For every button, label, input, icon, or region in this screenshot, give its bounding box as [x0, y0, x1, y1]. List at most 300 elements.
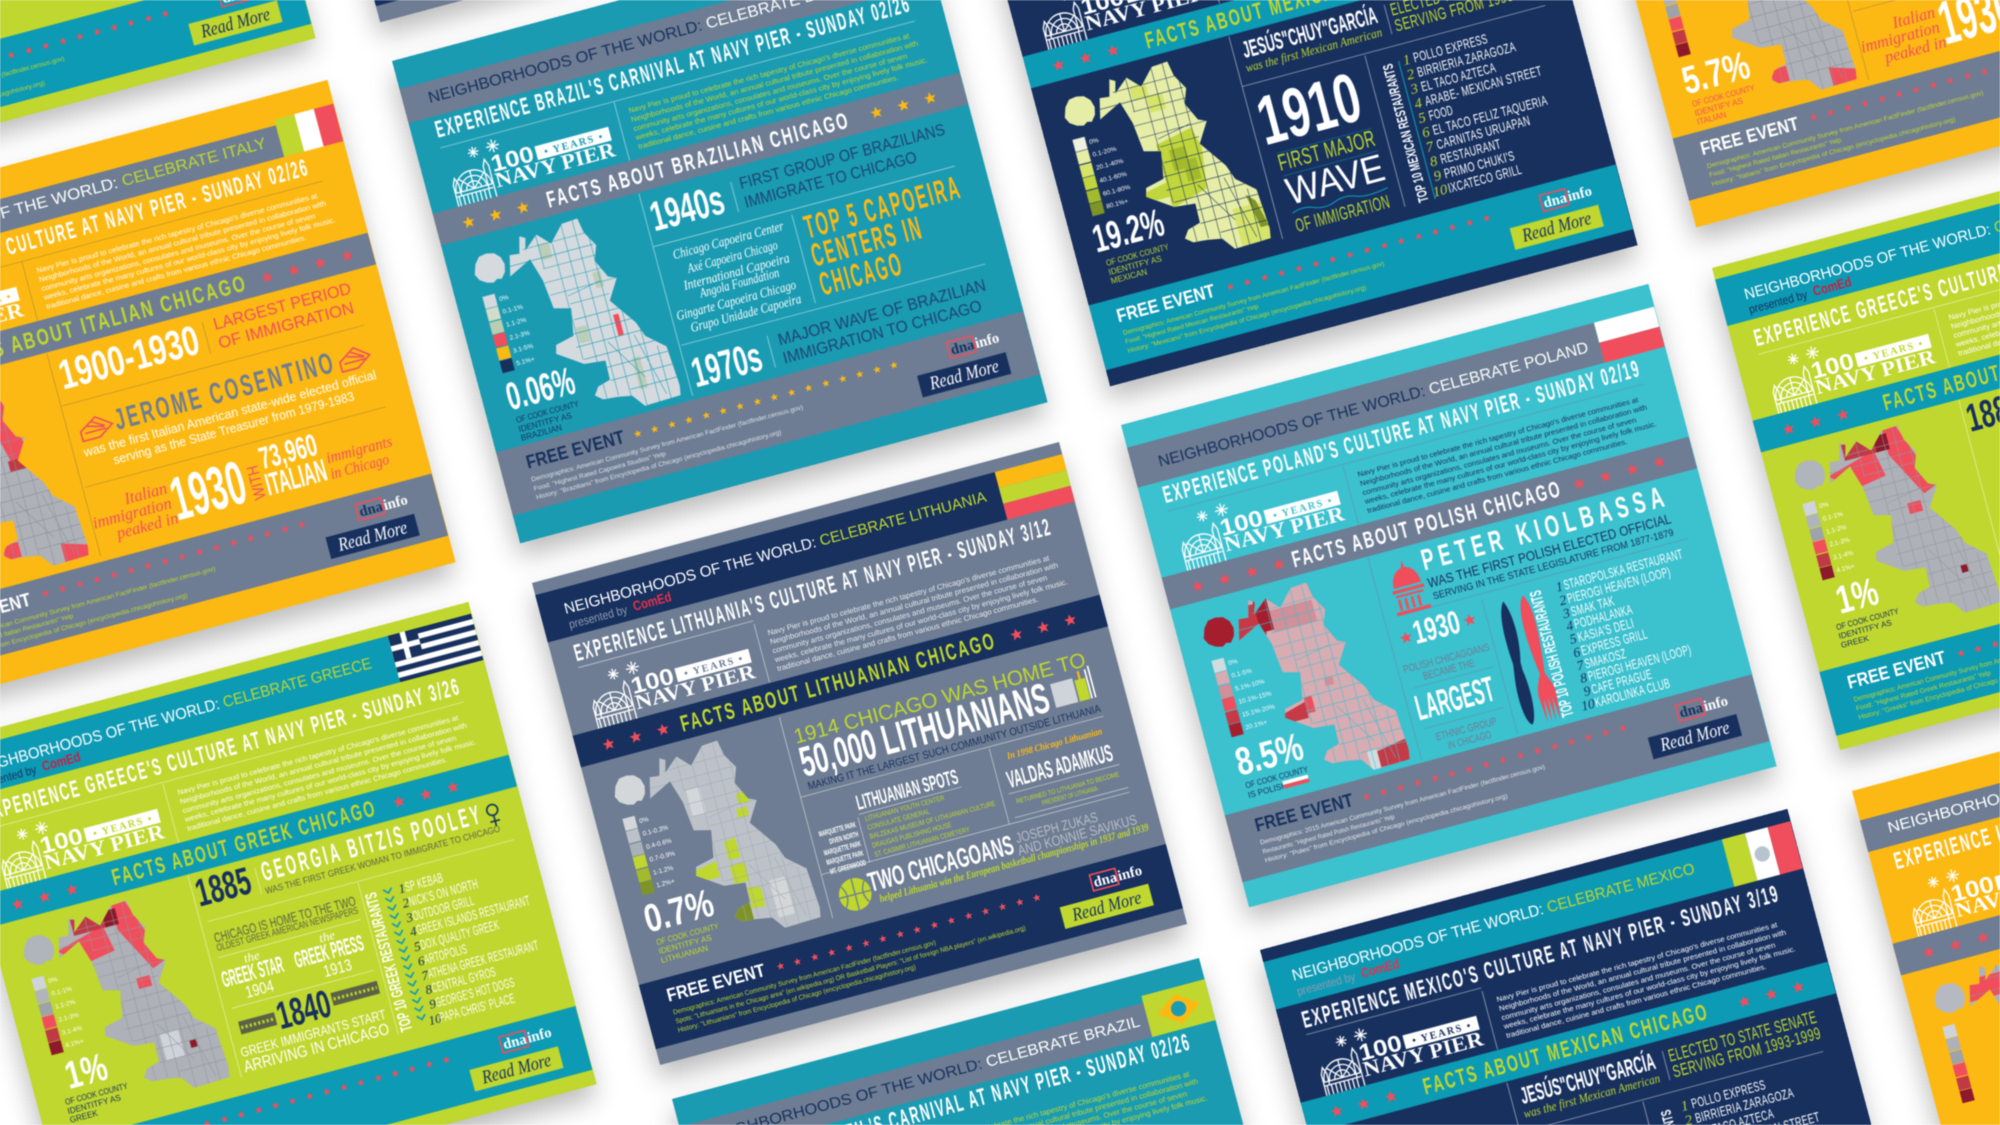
- footer band: info: [973, 330, 1001, 352]
- fact: 1930 largest ethnic group: BECAME THE: [1422, 657, 1476, 683]
- fact: 1940s: [645, 116, 953, 240]
- panel: Greece card: GREEK PRESS: [291, 930, 366, 973]
- restaurant list: 7: [1424, 139, 1436, 156]
- restaurant list: 7: [1575, 657, 1587, 674]
- Lithuanian spots list: DIVEN NORTH: [828, 830, 859, 846]
- fact: 1840 immigrants: 1840: [272, 982, 336, 1038]
- map legend: 0.1-1%: [51, 986, 73, 998]
- fact: Garcia: [1516, 1004, 1823, 1122]
- footer band: dna: [1542, 190, 1569, 212]
- intro paragraph: [35, 188, 339, 311]
- restaurant list: 3: [1560, 605, 1572, 622]
- fact: 1930 largest ethnic group: 1930: [1409, 603, 1464, 651]
- intro paragraph: community arts organizations, consulates and museums. Over the course of seven: [181, 733, 457, 815]
- fact: 1930 peak: [1852, 0, 2000, 78]
- header band: presented by: [1747, 288, 1809, 317]
- fact: 1840 immigrants: ARRIVING IN CHICAGO: [242, 1020, 391, 1076]
- intro paragraph: Navy Pier is proud to celebrate the rich tapestry of Chicago's diverse communities at: [628, 31, 911, 115]
- fact: Georgia Bitzis Pooley: [191, 793, 502, 916]
- facts band: [573, 595, 1108, 767]
- intro paragraph: community arts organizations, consulates and museums. Over the course of seven: [40, 211, 316, 293]
- restaurant list: IXCATECO GRILL: [1446, 162, 1523, 196]
- fact: 1930 peak: immigration: [91, 493, 174, 533]
- map legend: 20.1-40%: [1095, 158, 1124, 172]
- intro paragraph: [1947, 235, 2000, 358]
- fact: 1930 peak: Italian: [1889, 3, 1937, 33]
- footer band: Food: "Highest Rated Mexican Restaurants" Yelp: [1125, 304, 1260, 346]
- restaurant list: FOOD: [1427, 102, 1455, 123]
- logo: 100 years Navy Pier: NAVY PIER: [493, 139, 619, 192]
- fact: two Chicagoans: AND KONNIE SAVIKUS: [1016, 812, 1139, 859]
- fact: 50,000 Lithuanians: 1914 CHICAGO WAS HOME TO: [791, 648, 1088, 749]
- logo: 100 years Navy Pier: NAVY PIER: [1222, 503, 1348, 556]
- fact: 1930 peak: peaked in: [1882, 32, 1948, 67]
- statistic: IDENTITFY AS: [518, 411, 573, 434]
- statistic: ITALIAN: [1696, 110, 1728, 127]
- footer band: [1819, 531, 2000, 736]
- fact: Greek newspapers: OLDEST GREEK AMERICAN NEWSPAPERS: [216, 906, 360, 954]
- fact: 1970s: 1970s: [686, 333, 767, 396]
- footer band: info: [1566, 183, 1594, 205]
- choropleth map: [614, 740, 821, 928]
- statistic: OF COOK COUNTY: [1245, 765, 1310, 791]
- footer band: info: [1116, 863, 1144, 885]
- restaurant list: SMAK TAK: [1569, 593, 1616, 619]
- footer band: info: [1702, 693, 1730, 715]
- restaurant list: STAROPOLSKA RESTAURANT: [1562, 547, 1685, 593]
- capoeira centers list: [659, 218, 805, 339]
- footer band: Read More: [335, 517, 410, 556]
- fact: Georgia Bitzis Pooley: GEORGIA BITZIS POOLEY: [257, 798, 486, 887]
- logo: 100 years Navy Pier: 100: [1808, 348, 1857, 384]
- fact: 1930 peak: immigration: [1859, 17, 1942, 57]
- panel: Greece card, right edge: [1712, 127, 2000, 750]
- map legend: 1.1-2%: [1825, 524, 1847, 536]
- footer band: Demographics: American Community Survey from American FactFinder (factfinder.census.gov): [531, 404, 804, 484]
- restaurant list: [361, 850, 555, 1036]
- heading: top 5 capoeira: CHICAGO: [815, 245, 907, 302]
- intro paragraph: Navy Pier is proud to celebrate the rich tapestry of Chicago's diverse communities at: [177, 713, 460, 797]
- statistic: OF COOK COUNTY: [64, 1082, 129, 1107]
- footer band: dna: [1092, 869, 1119, 891]
- restaurant list: 5: [1568, 631, 1579, 647]
- fact: 1930 largest ethnic group: IN CHICAGO: [1446, 729, 1493, 752]
- map legend: 2.1-3%: [1829, 537, 1851, 549]
- statistic: 5.7%: [1677, 43, 1754, 103]
- footer band: [1673, 0, 2000, 201]
- capoeira centers list: Axé Capoeira Chicago: [685, 237, 779, 277]
- fact: 1900-1930: 1900-1930: [54, 316, 204, 398]
- logo: 100 years Navy Pier: NAVY PIER: [42, 821, 168, 874]
- fact: 1970s: [686, 272, 994, 396]
- fact: 1930 peak: 73,960: [255, 426, 321, 476]
- map legend: 4.1%+: [1836, 563, 1856, 574]
- footer band: History: "Mexicans" from Encyclopedia of Chicago (encyclopedia.chicagohistory.org): [1127, 284, 1367, 355]
- header band and Mexican flag: ComEd: [1359, 956, 1401, 981]
- map legend: [1802, 494, 1858, 580]
- fact: 1930 peak: ITALIAN: [261, 452, 331, 502]
- choropleth map: [23, 900, 230, 1088]
- intro paragraph: [766, 550, 1071, 673]
- map legend: [31, 969, 87, 1055]
- intro paragraph: [1495, 917, 1799, 1040]
- fact: 1930 peak: 1930: [163, 448, 253, 533]
- Lithuanian spots list: DRAUGAS PUBLISHING HOUSE: [871, 821, 953, 850]
- footer band: [48, 1006, 592, 1125]
- choropleth map: [1064, 60, 1272, 250]
- statistic: 0.06%: [501, 359, 579, 419]
- fact: Garcia: JESÚS"CHUY"GARCÍA: [1517, 1047, 1658, 1110]
- choropleth map: [1794, 425, 2000, 614]
- restaurant list: KASIA'S DELI: [1576, 616, 1636, 645]
- fact: Greek newspapers: the: [242, 947, 261, 966]
- footer band: [1225, 674, 1770, 882]
- facts band: FACTS ABOUT POLISH CHICAGO: [1289, 475, 1564, 572]
- logo: 100 years Navy Pier: 100: [628, 663, 677, 699]
- intro paragraph: traditional dance, cuisine and crafts from various ethnic Chicago communities.: [1366, 437, 1628, 515]
- logo: 100 years Navy Pier: [0, 269, 28, 368]
- fact: Jerome Cosentino: JEROME COSENTINO: [111, 346, 339, 437]
- fact: 1930 largest ethnic group: ETHNIC GROUP: [1435, 716, 1498, 743]
- fact: 1930 largest ethnic group: POLISH CHICAGOANS: [1402, 641, 1491, 676]
- restaurant list: 3: [403, 909, 415, 925]
- fact: two Chicagoans: JOSEPH ZUKAS: [1014, 810, 1100, 847]
- panel: Poland card: [1121, 284, 1776, 907]
- logo: 100 years Navy Pier: [584, 631, 760, 730]
- statistic: 8.5%: [1231, 724, 1308, 785]
- restaurant list: 6: [1571, 644, 1582, 660]
- restaurant list: CAFE PRAGUE: [1590, 667, 1654, 697]
- footer band: [0, 474, 448, 677]
- map legend: 3.1-4%: [61, 1025, 83, 1037]
- map legend: 20.1%+: [1245, 719, 1268, 731]
- intro paragraph: weeks, celebrate the many cultures of our world-class city by enjoying lively folk music.: [634, 55, 928, 142]
- intro paragraph: community arts organizations, consulates and museums. Over the course of seven: [1361, 415, 1637, 497]
- intro paragraph: Navy Pier is proud to celebrate the rich tapestry of Chicago's diverse communities at: [36, 191, 319, 275]
- restaurant list: 10: [1580, 696, 1597, 714]
- panel: Brazil card: [392, 0, 1047, 543]
- fact: 1840 immigrants: [228, 968, 392, 1076]
- statistic: OF COOK COUNTY: [515, 400, 580, 425]
- choropleth map: [1731, 0, 1858, 90]
- fact: Peter Kiolbassa: WAS THE FIRST POLISH ELECTED OFFICIAL: [1426, 511, 1673, 592]
- restaurant list: 6: [416, 953, 427, 969]
- panel: Italy card, bottom-right fragment: [1851, 750, 2000, 1125]
- map legend: [1211, 648, 1280, 737]
- fact: Valdas Adamkus: PRESIDENT OF LITHUANIA: [1041, 786, 1099, 807]
- footer band: Demographics: American Community Survey from American FactFinder (factfinder.census.gov): [672, 939, 937, 1016]
- statistic: OF COOK COUNTY: [655, 922, 720, 947]
- restaurant list: 8: [1578, 670, 1589, 686]
- fact: Valdas Adamkus: RETURNED TO LITHUANIA TO BECOME: [1016, 771, 1120, 806]
- map legend: 4.1%+: [65, 1038, 85, 1049]
- logo: 100 years Navy Pier: • YEARS •: [1272, 496, 1333, 522]
- restaurant list: CARNITAS URUAPAN: [1435, 113, 1532, 152]
- Lithuanian spots list: MARQUETTE PARK: [818, 820, 857, 839]
- fact: first major wave 1910: WAVE: [1281, 146, 1389, 214]
- panel: Lithuania card: [532, 442, 1187, 1065]
- restaurant list: ATHENA GREEK RESTAURANT: [426, 937, 540, 981]
- map legend: 0%: [1089, 137, 1100, 146]
- restaurant list: 10: [427, 1010, 444, 1028]
- logo: 100 years Navy Pier: NAVY PIER: [1361, 1028, 1487, 1081]
- statistic: IDENTITFY AS: [67, 1093, 122, 1116]
- fact: 1900-1930: OF IMMIGRATION: [216, 298, 356, 353]
- statistic: [1824, 565, 1905, 650]
- header band and Mexican flag: presented by: [1295, 970, 1357, 999]
- fact: 1900-1930: LARGEST PERIOD: [211, 279, 353, 334]
- fact: Jerome Cosentino: [73, 337, 382, 475]
- map legend: 0%: [48, 976, 59, 985]
- statistic: [53, 1040, 134, 1125]
- footer band: FREE EVENT: [1252, 789, 1356, 835]
- intro paragraph: community arts organizations, consulates and museums. Over the course of seven: [771, 573, 1048, 655]
- panel: Greece card: [0, 602, 596, 1125]
- map legend: 5.1%-10%: [1234, 678, 1266, 693]
- map legend: 0%: [499, 294, 510, 303]
- statistic: [1088, 200, 1176, 288]
- intro paragraph: Neighborhoods of the World, an annual cultural tribute presented in collaboration with: [1359, 403, 1648, 488]
- Lithuanian spots list: MT. GREENWOOD: [829, 858, 867, 876]
- fact: 1930 peak: immigrants: [325, 433, 394, 467]
- choropleth map: [1203, 582, 1410, 770]
- restaurant list: EXPRESS GRILL: [1579, 626, 1649, 658]
- restaurant list: ARTOPOLIS: [422, 941, 469, 967]
- statistic: GREEK: [1840, 634, 1870, 650]
- fact: Valdas Adamkus: VALDAS ADAMKUS: [1004, 740, 1116, 794]
- restaurant list: 2: [401, 895, 411, 911]
- fact: Greek newspapers: the: [317, 927, 337, 946]
- statistic: 1%: [1831, 569, 1883, 623]
- header band and Polish flag: NEIGHBORHOODS OF THE WORLD: CELEBRATE POLAND: [1157, 340, 1590, 471]
- header band and Lithuanian flag: NEIGHBORHOODS OF THE WORLD: CELEBRATE LITHUANIA: [562, 488, 989, 618]
- fact: 50,000 Lithuanians: [791, 648, 1103, 793]
- fact: first major wave 1910: OF IMMIGRATION: [1293, 191, 1392, 236]
- Lithuanian spots list: [811, 758, 1003, 877]
- intro paragraph: traditional dance, cuisine and crafts from various ethnic Chicago communities.: [1505, 962, 1767, 1040]
- restaurant list: RESTAURANT: [1439, 136, 1503, 167]
- map legend: 40.1-60%: [1099, 171, 1128, 185]
- facts band: [1753, 280, 2000, 452]
- restaurant list: TOP 10 GREEK RESTAURANTS: [362, 890, 416, 1034]
- statistic: IDENTITFY AS: [658, 933, 713, 956]
- header band: [399, 0, 936, 123]
- heading: top 5 capoeira: [800, 168, 980, 302]
- restaurant list: SP KEBAB: [403, 870, 445, 895]
- logo: 100 years Navy Pier: [1764, 316, 1940, 415]
- fact: two Chicagoans: TWO CHICAGOANS: [864, 829, 1017, 898]
- footer band: Spots: "Lithuanians in the Chicago area" (en.wikipedia.org) OR Basketball Players: "List of foreign NBA players" (en.wikipedia.org): [675, 925, 1027, 1025]
- panel: Mexico card: [982, 0, 1637, 386]
- logo: 100 years Navy Pier: [0, 791, 169, 890]
- logo: 100 years Navy Pier: [1173, 473, 1349, 572]
- heading: top 5 capoeira: CENTERS IN: [807, 208, 927, 273]
- header band and Greek flag: [0, 614, 483, 801]
- restaurant list: TOP 10 POLISH RESTAURANTS: [1527, 588, 1577, 719]
- fact: 1970s: MAJOR WAVE OF BRAZILIAN: [776, 276, 988, 349]
- map legend: 0%: [1819, 501, 1830, 510]
- statistic: [1677, 43, 1761, 128]
- facts band: [1893, 803, 2000, 975]
- heading: top 5 capoeira: TOP 5 CAPOEIRA: [800, 168, 965, 245]
- logo: 100 years Navy Pier: • YEARS •: [683, 654, 744, 680]
- footer band: Demographics: American Community Survey from American FactFinder (factfinder.census.gov): [1706, 89, 1984, 170]
- fact: 50,000 Lithuanians: MAKING IT THE LARGEST SUCH COMMUNITY OUTSIDE LITHUANIA: [807, 703, 1103, 793]
- fact: first major wave 1910: FIRST MAJOR: [1275, 125, 1378, 176]
- footer band: FREE EVENT: [1845, 646, 1948, 693]
- capoeira centers list: International Capoeira: [681, 250, 791, 294]
- Lithuanian spots list: MARQUETTE PARK: [823, 839, 862, 858]
- fact: Greek newspapers: [209, 893, 374, 1007]
- logo: 100 years Navy Pier: • YEARS •: [1863, 339, 1924, 365]
- map legend: 0.4-0.6%: [645, 837, 673, 851]
- fact: 1930 peak: [84, 407, 401, 554]
- map legend: 0.1-0.3%: [642, 824, 669, 838]
- panel: Italy card, top-right fragment: [1635, 0, 2000, 228]
- icon: capitol: [1384, 556, 1431, 616]
- logo: 100 years Navy Pier: 100: [37, 823, 86, 859]
- restaurant list: 4: [408, 923, 419, 939]
- fact: Garcia: SERVING FROM 1993-1999: [1670, 1023, 1823, 1082]
- footer band: Read More: [1069, 887, 1144, 926]
- map legend: 1.1-2%: [54, 999, 76, 1011]
- fact: 1930 peak: Italian: [121, 479, 169, 509]
- footer band: info: [526, 1025, 553, 1047]
- logo: 100 years Navy Pier: [1904, 839, 2000, 938]
- intro paragraph: weeks, celebrate the many cultures of our world-class city by enjoying lively folk music.: [1502, 944, 1796, 1031]
- map legend: [1072, 129, 1135, 216]
- fact: Greek newspapers: CHICAGO IS HOME TO THE TWO: [212, 893, 358, 947]
- restaurant list: EL TACO FELIZ TAQUERIA: [1431, 93, 1549, 138]
- logo: 100 years Navy Pier: NAVY PIER: [1813, 346, 1939, 399]
- map legend: 1.2%+: [656, 878, 676, 889]
- fact: first major wave 1910: 1910: [1249, 58, 1369, 160]
- footer band: Demographics: American Community Survey from American FactFinder (factfinder.census.gov): [1122, 260, 1385, 337]
- panel: Lithuania card, top sliver: [252, 0, 907, 22]
- statistic: IDENTITFY AS: [1838, 618, 1893, 641]
- facts band: [1162, 437, 1697, 609]
- footer band: [496, 311, 1040, 516]
- header band: [1715, 161, 2000, 326]
- panel: Greece card, top-left fragment: [0, 0, 315, 179]
- restaurant list: [1525, 547, 1716, 720]
- footer band: FREE EVENT: [1114, 280, 1218, 326]
- Lithuanian spots list: BALZEKAS MUSEUM OF LITHUANIAN CULTURE: [869, 800, 997, 841]
- fact: 1930 peak: WITH: [244, 463, 270, 501]
- map legend: 0.1-5%: [1231, 668, 1253, 680]
- restaurant list: 4: [1413, 95, 1425, 113]
- fact: Greek newspapers: 1904: [243, 977, 276, 1002]
- restaurant list: POLLO EXPRESS: [1690, 1077, 1767, 1111]
- panel: Mexico card, bottom fragment: [1260, 809, 1915, 1125]
- header band and Polish flag: [1127, 307, 1665, 488]
- footer band: History: "Poles" from Encyclopedia of Chicago (encyclopedia.chicagohistory.org): [1264, 793, 1508, 865]
- statistic: [1231, 724, 1312, 801]
- footer band: History: "Brazilians" from Encyclopedia of Chicago (encyclopedia.chicagohistory.org): [536, 429, 782, 502]
- map legend: 0%: [1228, 658, 1239, 667]
- logo: 100 years Navy Pier: • YEARS •: [1411, 1021, 1472, 1047]
- logo: 100 years Navy Pier: NAVY PIER: [633, 661, 759, 714]
- footer band: dna: [501, 1031, 529, 1053]
- map legend: [482, 287, 538, 373]
- fact: 1930 largest ethnic group: LARGEST: [1411, 670, 1499, 728]
- intro paragraph: Neighborhoods of the World, an annual cultural tribute presented in collaboration with: [630, 39, 919, 124]
- restaurant list: 10: [1431, 182, 1450, 201]
- map legend: 3.1-4%: [1832, 550, 1854, 562]
- logo: 100 years Navy Pier: • YEARS •: [92, 814, 153, 840]
- panel: Italy card: [0, 80, 455, 703]
- intro paragraph: [176, 710, 480, 833]
- fact: 1940s: IMMIGRATE TO CHICAGO: [742, 147, 919, 212]
- header band and Lithuanian flag: ComEd: [631, 589, 673, 614]
- footer band: History: "Lithuanians" from Encyclopedia of Chicago (encyclopedia.chicagohistory.org): [677, 964, 917, 1034]
- statistic: [501, 359, 586, 444]
- event title: EXPERIENCE LITHUANIA'S CULTURE AT NAVY PIER - SUNDAY 3/12: [571, 514, 1054, 667]
- intro paragraph: traditional dance, cuisine and crafts from various ethnic Chicago communities.: [186, 755, 448, 833]
- intro paragraph: Neighborhoods of the World, an annual cultural tribute presented in collaboration with: [769, 561, 1059, 646]
- fact: Valdas Adamkus: In 1998 Chicago Lithuanian: [1005, 726, 1103, 762]
- statistic: MEXICAN: [1110, 268, 1148, 286]
- fact: 50,000 Lithuanians: 50,000 LITHUANIANS: [795, 674, 1055, 787]
- intro paragraph: community arts organizations, consulates and museums. Over the course of seven: [1500, 940, 1776, 1022]
- facts band: [0, 755, 517, 927]
- logo: 100 years Navy Pier: [1034, 0, 1210, 51]
- map legend: 0.7-0.9%: [649, 850, 676, 864]
- map legend: 15.1%-20%: [1241, 703, 1276, 719]
- logo: 100 years Navy Pier: 100: [1948, 871, 1997, 907]
- footer band: History: "Italians" from Encyclopedia of Chicago (encyclopedia.chicagohistory.org): [1711, 116, 1956, 188]
- footer band: dna: [949, 337, 977, 359]
- map legend: 60.1-80%: [1102, 184, 1131, 198]
- statistic: BRAZILIAN: [520, 423, 563, 443]
- footer band: Food: "Highest Rated Greek Restaurants" Yelp: [1855, 670, 1992, 713]
- icon: buildings: [1048, 666, 1096, 708]
- statistic: OF COOK COUNTY: [1691, 84, 1756, 109]
- restaurant list: 4: [1564, 618, 1575, 634]
- facts band: FACTS ABOUT GREEK CHICAGO: [109, 795, 379, 890]
- restaurant list: 1: [1679, 1098, 1690, 1115]
- intro paragraph: Neighborhoods of the World, an annual cultural tribute presented in collaboration with: [1498, 928, 1787, 1013]
- capoeira centers list: Angola Foundation: [697, 265, 781, 302]
- intro paragraph: weeks, celebrate the many cultures of our world-class city by enjoying lively folk music.: [42, 215, 336, 302]
- restaurant list: ARABE- MEXICAN STREET: [1423, 63, 1544, 109]
- capoeira centers list: Gingarte Capoeira Chicago: [675, 277, 798, 324]
- footer band: FREE EVENT: [664, 959, 768, 1006]
- statistic: 19.2%: [1088, 200, 1169, 261]
- restaurant list: NICK'S ON NORTH: [407, 876, 480, 909]
- map legend: 80.1%+: [1106, 198, 1129, 210]
- fact: Jerome Cosentino: was the first Italian American state-wide elected official: [81, 367, 378, 460]
- restaurant list: 6: [1420, 124, 1432, 142]
- restaurant list: PIEROGI HEAVEN (LOOP): [1565, 564, 1672, 606]
- statistic: IS POLISH: [1247, 781, 1288, 800]
- fact: Valdas Adamkus: [998, 723, 1128, 818]
- panel: Brazil card, bottom fragment: [672, 958, 1327, 1125]
- facts band: FACTS ABOUT LITHUANIAN CHICAGO: [677, 627, 999, 737]
- restaurant list: POLLO EXPRESS: [1412, 31, 1489, 65]
- fact: Georgia Bitzis Pooley: WAS THE FIRST GREEK WOMAN TO IMMIGRATE TO CHICAGO: [264, 824, 501, 896]
- map legend: [1942, 1024, 1975, 1103]
- restaurant list: 1: [1554, 579, 1565, 595]
- choropleth map: [474, 218, 682, 406]
- map legend: 1-1.2%: [652, 865, 674, 877]
- restaurant list: BIRRIERIA ZARAGOZA: [1694, 1085, 1796, 1125]
- restaurant list: PIEROGI HEAVEN (LOOP): [1586, 642, 1693, 684]
- header band and Italian flag: [0, 104, 343, 282]
- facts band: FACTS ABOUT MEXICAN CHICAGO: [1420, 998, 1711, 1100]
- Lithuanian spots list: CONSULATE GENERAL: [866, 808, 931, 832]
- restaurant list: 1: [397, 880, 407, 896]
